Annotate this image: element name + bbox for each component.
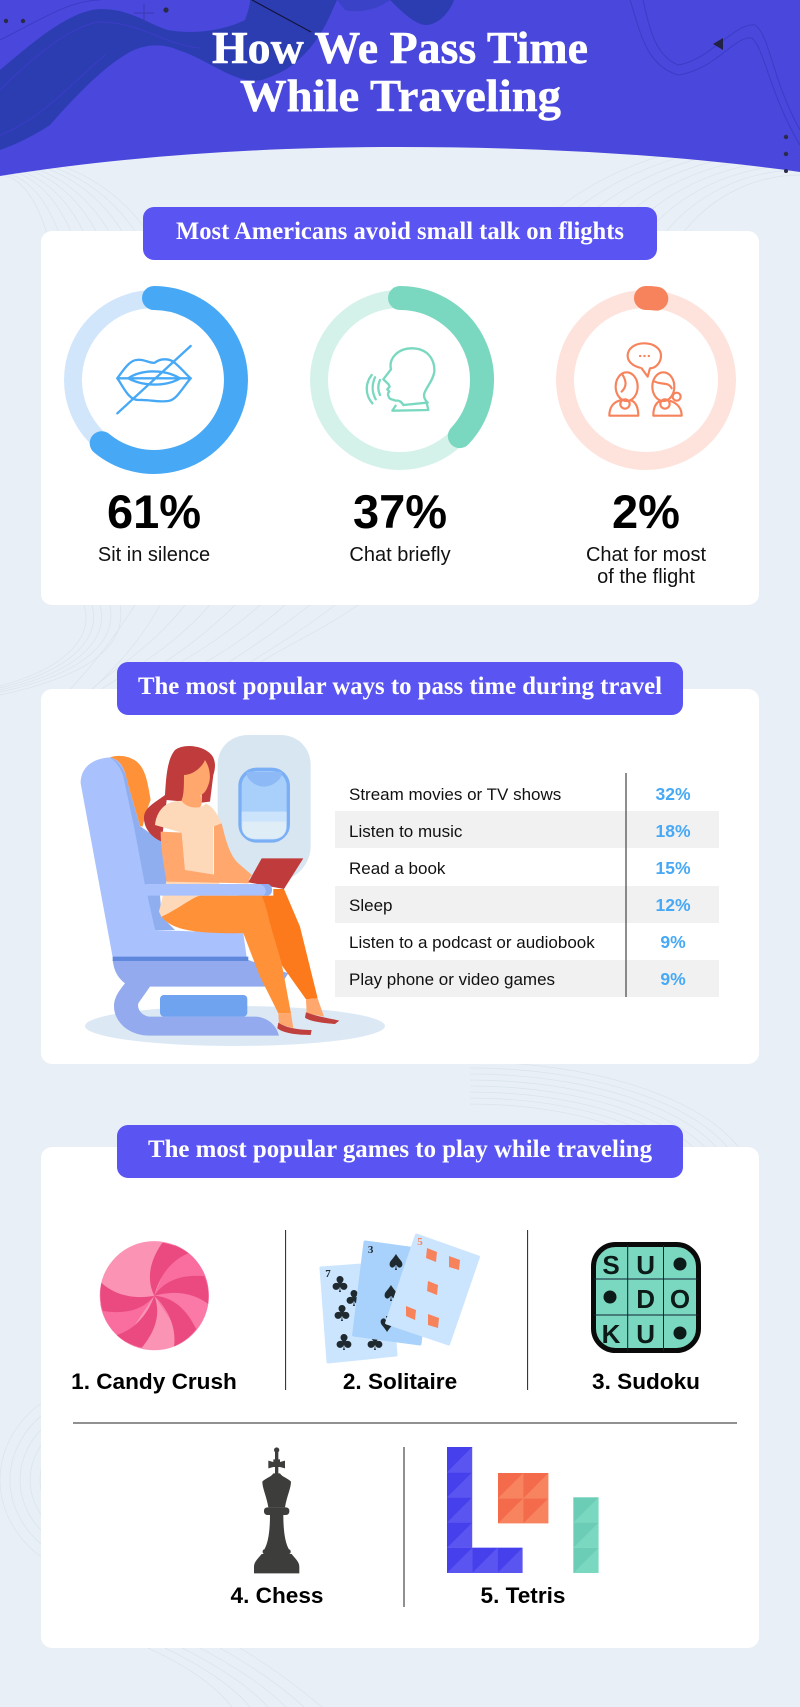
icon: two people talking	[609, 343, 682, 416]
card: three of spades: ♠	[381, 1282, 401, 1307]
stat: 61%: 61%	[107, 485, 201, 538]
icon: sudoku board: U	[636, 1319, 655, 1349]
icon: chess king	[254, 1447, 299, 1573]
title: While Traveling	[240, 70, 561, 121]
panel: small talk on flights	[41, 207, 759, 605]
panel: popular ways to pass time	[41, 662, 759, 1064]
card: seven of clubs: ♣	[332, 1302, 352, 1327]
icon: sudoku board: D	[636, 1284, 655, 1314]
icon: crossed-out lips	[117, 346, 191, 413]
icon: sudoku board: U	[636, 1250, 655, 1280]
label: chess: 4. Chess	[231, 1583, 323, 1608]
illustration: woman on a plane seat with laptop	[81, 735, 385, 1046]
header banner	[0, 0, 800, 176]
icon: candy	[92, 1241, 217, 1352]
donut: 61% sit in silence	[73, 298, 236, 462]
card: five of diamonds	[387, 1235, 478, 1344]
heading: popular games	[117, 1125, 683, 1178]
row: sleep: 12%	[655, 895, 691, 915]
icon: sudoku board: K	[602, 1319, 621, 1349]
icon: sudoku board: O	[670, 1284, 690, 1314]
heading: popular ways: The most popular ways to pass time during travel	[138, 673, 662, 700]
panel: popular games	[41, 1125, 759, 1648]
row: stream movies: Stream movies or TV shows	[349, 785, 561, 804]
stat: 2%: 2%	[612, 485, 680, 538]
title: How We Pass Time	[212, 22, 588, 73]
donut: 2% chat for most of the flight	[565, 298, 727, 461]
icon: tetris blocks	[447, 1447, 599, 1573]
table: activities and percentages	[335, 773, 719, 997]
row: listen to music	[349, 821, 691, 841]
row: podcast or audiobook	[349, 932, 686, 952]
icon: speaking head	[367, 348, 434, 411]
card: five of diamonds: 5	[417, 1236, 423, 1248]
card: three of spades: 3	[368, 1244, 374, 1256]
card: seven of clubs: ♣	[344, 1287, 364, 1312]
label: tetris: 5. Tetris	[481, 1583, 565, 1608]
heading: small talk: Most Americans avoid small talk on flights	[176, 218, 624, 245]
row: phone or video games: Play phone or video games	[349, 970, 555, 989]
row: read a book	[349, 858, 691, 878]
label: sudoku: 3. Sudoku	[592, 1369, 700, 1394]
icon: sudoku board: S	[602, 1250, 620, 1280]
card: seven of clubs: 7	[325, 1268, 331, 1280]
heading: popular ways	[117, 662, 683, 715]
row: phone or video games	[349, 969, 686, 989]
card: seven of clubs	[321, 1263, 396, 1362]
row: stream movies: 32%	[655, 784, 691, 804]
row: sleep: Sleep	[349, 896, 392, 915]
label: candy crush: 1. Candy Crush	[71, 1369, 237, 1394]
card: three of spades: ♠	[377, 1310, 397, 1335]
row: podcast or audiobook: Listen to a podcast or audiobook	[349, 933, 595, 952]
heading: small talk	[143, 207, 657, 260]
row: listen to music: 18%	[655, 821, 691, 841]
heading: popular games: The most popular games to play while traveling	[148, 1136, 652, 1163]
card: seven of clubs: ♣	[334, 1331, 354, 1356]
donut: 37% chat briefly	[319, 298, 482, 461]
label: sit in silence: Sit in silence	[98, 544, 210, 566]
icon: sudoku board	[594, 1244, 698, 1351]
card: seven of clubs: ♣	[365, 1331, 385, 1356]
card: three of spades	[354, 1242, 431, 1344]
label: chat briefly: Chat briefly	[349, 544, 451, 566]
row: read a book: Read a book	[349, 859, 446, 878]
label: chat for most of the flight: Chat for most	[586, 544, 706, 566]
card: seven of clubs: ♣	[330, 1273, 350, 1298]
row: phone or video games: 9%	[660, 969, 686, 989]
card: three of spades: ♠	[386, 1251, 406, 1276]
row: read a book: 15%	[655, 858, 691, 878]
row: sleep	[349, 895, 691, 915]
title	[212, 22, 588, 121]
label: chat for most of the flight: of the flight	[597, 566, 695, 588]
row: listen to music: Listen to music	[349, 822, 463, 841]
label: solitaire: 2. Solitaire	[343, 1369, 457, 1394]
stat: 37%: 37%	[353, 485, 447, 538]
row: podcast or audiobook: 9%	[660, 932, 686, 952]
icon: playing cards	[321, 1235, 478, 1362]
row: stream movies	[349, 784, 691, 804]
